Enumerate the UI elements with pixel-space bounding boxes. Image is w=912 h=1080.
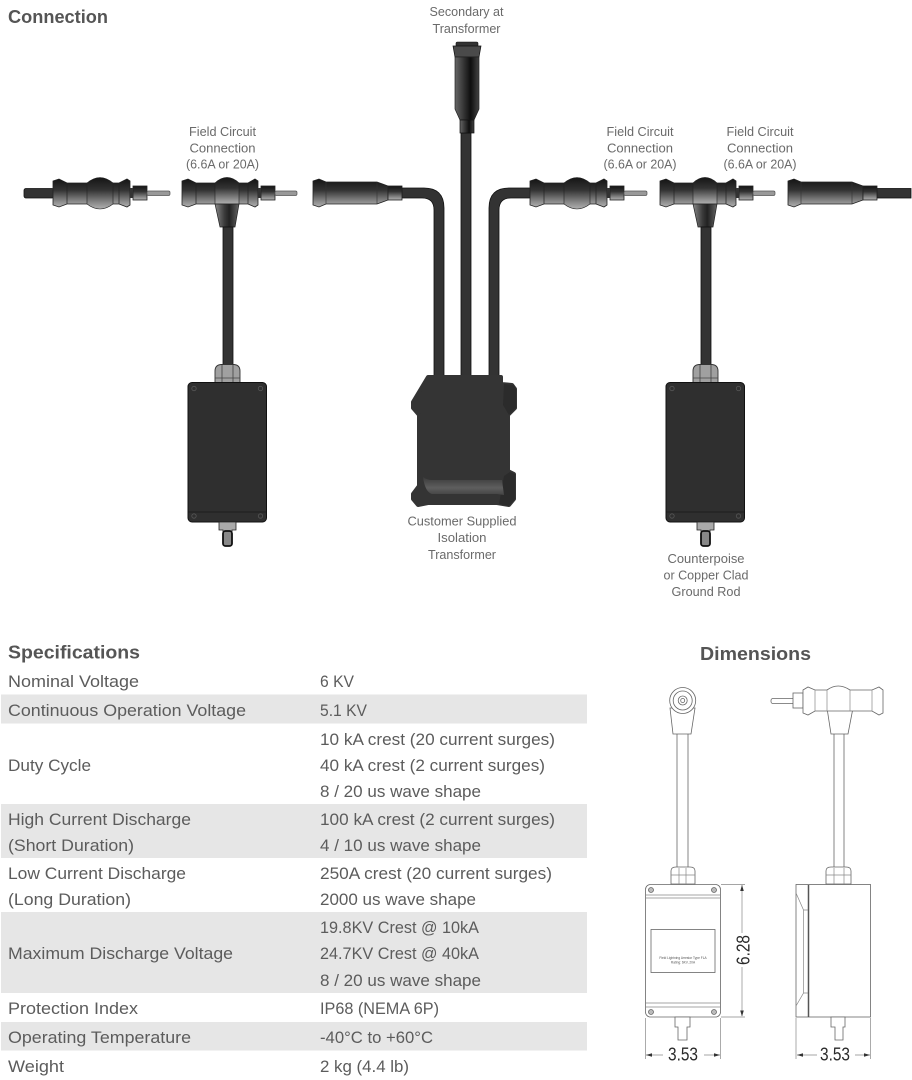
heading: Dimensions: Dimensions: [700, 644, 811, 664]
label: Field Circuit Connection centre right: (6.6A or 20A): [604, 158, 676, 172]
row: Operating Temperature: -40°C to +60°C: [320, 1028, 433, 1047]
row: Maximum Discharge Voltage: Maximum Discharge Voltage: [8, 944, 233, 963]
connector: left inline field coupler with cable: [24, 178, 170, 209]
row: High Current Discharge: (Short Duration): [8, 836, 134, 855]
row: Low Current Discharge: 2000 us wave shape: [320, 890, 476, 909]
connector: far right plug with cable: [788, 179, 911, 207]
nameplate text: Rating: 6KV, 20A: [671, 960, 696, 964]
dimension 6.28: 6.28: [734, 935, 754, 965]
connector: left plug: [313, 179, 402, 207]
label: Field Circuit Connection left: Field Circuit: [189, 125, 257, 139]
row: Maximum Discharge Voltage: 19.8KV Crest @ 10kA: [320, 918, 480, 937]
row: Nominal Voltage: 6 KV: [320, 672, 355, 691]
label: Secondary at Transformer: Secondary at: [430, 5, 504, 19]
label: Field Circuit Connection far right: (6.6A or 20A): [724, 158, 796, 172]
label: Secondary at Transformer: [430, 5, 504, 36]
row: Operating Temperature: [8, 1028, 433, 1047]
arrester: left T connector with enclosure: [182, 178, 297, 546]
row: Protection Index: Protection Index: [8, 999, 139, 1018]
drawing: side view with dimensions: [771, 686, 883, 1064]
row: High Current Discharge: [8, 810, 555, 855]
nameplate text: Field Lightning Arrestor Type FLA: [659, 956, 707, 960]
connector: right inline field coupler: [530, 178, 647, 209]
label: Field Circuit Connection left: Connection: [190, 142, 256, 156]
label: Counterpoise or Copper Clad Ground Rod: [664, 552, 749, 599]
row: Low Current Discharge: [8, 864, 552, 909]
label: Field Circuit Connection left: [186, 125, 259, 172]
label: Counterpoise or Copper Clad Ground Rod: Ground Rod: [672, 585, 741, 599]
heading: Specifications: Specifications: [8, 642, 140, 662]
row: Maximum Discharge Voltage: [8, 918, 481, 990]
row: High Current Discharge: 4 / 10 us wave shape: [320, 836, 481, 855]
label: Field Circuit Connection centre right: [604, 125, 676, 172]
row: Maximum Discharge Voltage: 24.7KV Crest @ 40kA: [320, 944, 480, 963]
row: Nominal Voltage: Nominal Voltage: [8, 672, 139, 691]
label: Field Circuit Connection left: (6.6A or 20A): [186, 158, 259, 172]
row: Duty Cycle: 40 kA crest (2 current surges): [320, 756, 545, 775]
label: Field Circuit Connection far right: [724, 125, 796, 172]
row: Nominal Voltage: [8, 672, 355, 691]
row: Continuous Operation Voltage: [8, 701, 368, 720]
row: Duty Cycle: Duty Cycle: [8, 756, 91, 775]
row: Continuous Operation Voltage: Continuous Operation Voltage: [8, 701, 246, 720]
label: Field Circuit Connection far right: Field Circuit: [726, 125, 794, 139]
label: Field Circuit Connection centre right: Connection: [607, 142, 673, 156]
cables: three leads into transformer: [402, 133, 531, 378]
row: Continuous Operation Voltage: 5.1 KV: [320, 701, 368, 720]
connector: secondary at transformer plug: [453, 42, 481, 133]
label: Field Circuit Connection far right: Connection: [727, 142, 793, 156]
label: Secondary at Transformer: Transformer: [432, 22, 500, 36]
row: Operating Temperature: Operating Temperature: [8, 1028, 191, 1047]
row: Weight: [8, 1057, 409, 1076]
transformer: customer supplied isolation transformer: [413, 377, 516, 506]
row: Low Current Discharge: Low Current Discharge: [8, 864, 186, 883]
row: Protection Index: [8, 999, 439, 1018]
label: Customer Supplied Isolation Transformer: Isolation: [438, 531, 487, 545]
label: Field Circuit Connection centre right: Field Circuit: [606, 125, 674, 139]
row: High Current Discharge: 100 kA crest (2 current surges): [320, 810, 555, 829]
title: Connection: Connection: [8, 7, 108, 27]
dimension 3.53 side: 3.53: [820, 1044, 850, 1064]
label: Customer Supplied Isolation Transformer: Customer Supplied: [408, 514, 517, 528]
row: Duty Cycle: [8, 730, 555, 801]
label: Counterpoise or Copper Clad Ground Rod: Counterpoise: [668, 552, 745, 566]
row: Maximum Discharge Voltage: 8 / 20 us wave shape: [320, 971, 481, 990]
label: Customer Supplied Isolation Transformer: Transformer: [428, 548, 496, 562]
label: Counterpoise or Copper Clad Ground Rod: or Copper Clad: [664, 568, 749, 582]
row: Duty Cycle: 10 kA crest (20 current surges): [320, 730, 555, 749]
row: Low Current Discharge: 250A crest (20 current surges): [320, 864, 552, 883]
table: specifications: [1, 672, 587, 1076]
dimension 3.53 front: 3.53: [668, 1044, 698, 1064]
row: High Current Discharge: High Current Discharge: [8, 810, 191, 829]
row: Low Current Discharge: (Long Duration): [8, 890, 131, 909]
nameplate text: [659, 956, 707, 964]
arrester: right T connector with enclosure: [660, 178, 775, 546]
label: Customer Supplied Isolation Transformer: [408, 514, 517, 562]
row: Weight: Weight: [8, 1057, 64, 1076]
row: Weight: 2 kg (4.4 lb): [320, 1057, 409, 1076]
row: Duty Cycle: 8 / 20 us wave shape: [320, 782, 481, 801]
row: Protection Index: IP68 (NEMA 6P): [320, 999, 439, 1018]
drawing: front view with dimensions: [646, 688, 754, 1064]
